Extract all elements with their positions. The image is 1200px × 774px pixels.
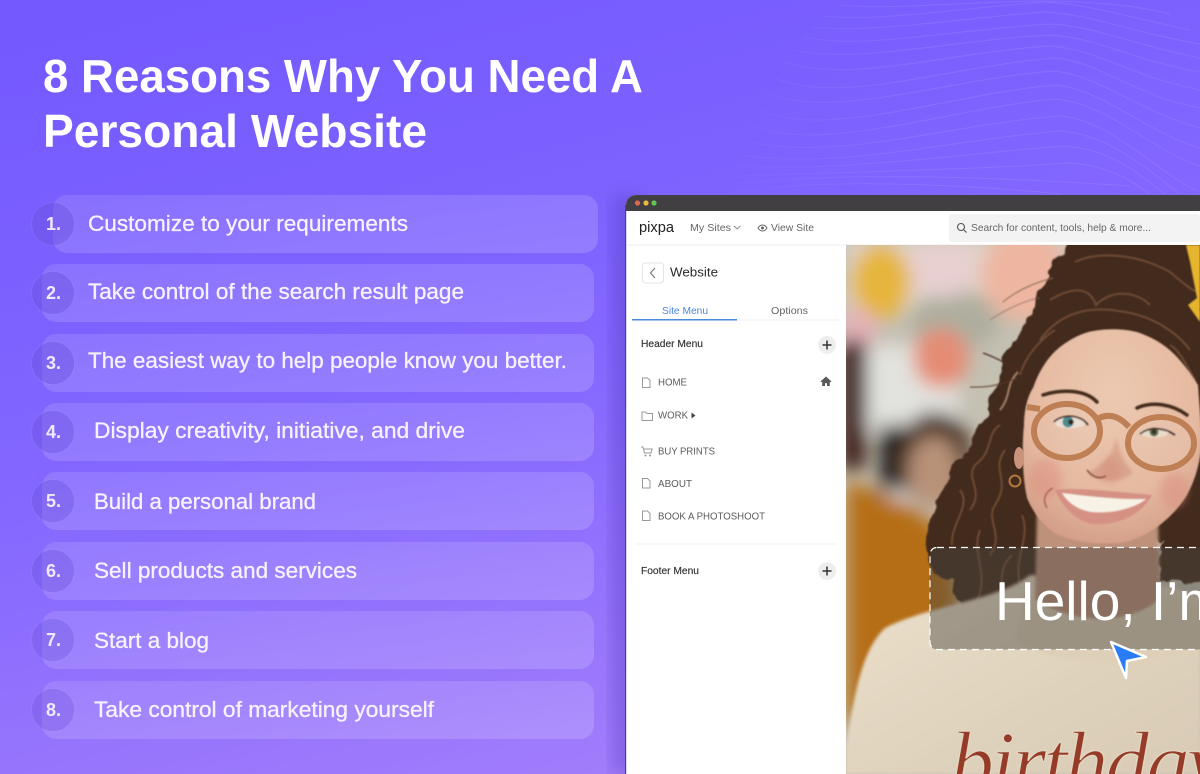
sidebar heading: Website [670,264,718,280]
earring [1010,476,1020,486]
tabs: Site Menu [662,305,708,317]
menu item: home: HOME [658,378,687,388]
footer menu: Footer Menu [641,566,699,577]
reason 1: 1. [46,214,61,234]
yellow party hat [1186,245,1200,322]
reason 8: 8. [46,700,61,720]
menu item: home [642,376,832,388]
cursor arrow [1111,642,1146,678]
window controls [635,200,657,206]
blurred party background [838,229,1068,730]
back button [642,263,664,283]
reason 6: 6. [46,561,61,581]
eyebrows [1043,391,1187,415]
reason 5: Build a personal brand [94,489,316,514]
top navigation bar [627,214,1200,245]
nose [1090,440,1132,481]
top navigation bar: View Site [771,222,814,234]
shirt [846,575,1200,774]
title: 8 Reasons Why You Need A [43,50,643,102]
top navigation bar: My Sites [690,222,731,234]
menu item: work [642,410,696,422]
title [43,50,643,157]
tabs: Options [771,305,808,317]
cheek blush [1030,457,1188,508]
back hair [927,238,1200,619]
header menu [641,336,836,354]
flyaway hair and curl highlights [952,255,1198,612]
glasses [1027,404,1194,469]
reason 4 [32,403,594,461]
reason 7 [32,611,594,669]
footer menu [641,562,836,580]
reason 2: Take control of the search result page [88,279,464,304]
reason 7: Start a blog [94,628,209,653]
reason 4: 4. [46,422,61,442]
reason 1: Customize to your requirements [88,211,408,236]
photo of smiling woman [838,229,1200,774]
reason 6: Sell products and services [94,558,357,583]
neck [1035,510,1160,619]
browser shadow [612,196,642,774]
menu item: book a photoshoot: BOOK A PHOTOSHOOT [658,512,765,522]
sidebar [632,263,841,580]
top navigation bar: pixpa [639,220,675,236]
title bar [626,195,1200,211]
menu item: buy prints: BUY PRINTS [658,446,715,458]
face [1023,329,1200,544]
reason 5 [32,472,594,530]
reason 6 [32,542,594,600]
reason 4: Display creativity, initiative, and drive [94,418,465,443]
selected text box [930,548,1200,650]
top navigation bar: Search for content, tools, help & more... [971,222,1151,234]
reason 8: Take control of marketing yourself [94,697,435,722]
reason 1 [32,195,598,253]
reason 3 [32,334,594,392]
tabs [632,305,841,320]
window frame [626,195,1200,774]
reason 3: The easiest way to help people know you better. [88,348,567,373]
ear [1014,447,1024,469]
title: Personal Website [43,105,427,157]
eyes [1054,416,1175,438]
menu item: about: ABOUT [658,479,692,490]
menu item: work: WORK [658,410,688,422]
smile [1045,488,1152,524]
reason 2 [32,264,594,322]
collar [1015,592,1200,663]
reason 7: 7. [46,630,61,650]
reason 8 [32,681,594,739]
reason 5: 5. [46,491,61,511]
menu item: about [642,478,692,490]
browser window [625,195,1200,774]
reason 2: 2. [46,283,61,303]
header menu: Header Menu [641,339,703,350]
reason 3: 3. [46,353,61,373]
decorative wave lines [736,1,1200,194]
reasons list [32,195,598,739]
